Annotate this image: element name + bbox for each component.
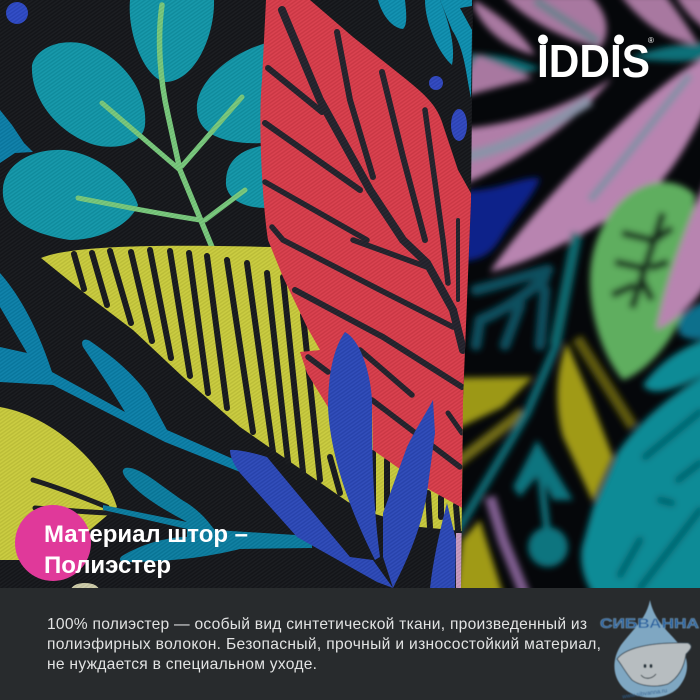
pink circle accent — [15, 505, 91, 581]
dark teal fronds — [476, 270, 548, 345]
red leaf — [260, 0, 472, 510]
green stem with branches — [78, 5, 245, 252]
dark veins of yellow round leaf — [33, 480, 110, 513]
blue frond behind heading — [103, 468, 312, 562]
heading: material — [44, 521, 248, 579]
logo: IDDIS: IDDIS — [537, 35, 650, 87]
pink strip at fold — [456, 533, 462, 588]
watermark: Sibvanna logo — [600, 600, 699, 700]
blue dots near red leaf — [429, 76, 467, 141]
description text: полиэфирных волокон. Безопасный, прочный и износостойкий материал, — [47, 636, 601, 653]
description text: 100% полиэстер — особый вид синтетической ткани, произведенный из — [47, 616, 587, 633]
blue leaves in front — [230, 332, 456, 588]
icon: small blue dot — [6, 2, 28, 24]
panel: sharp patterned curtain on the left — [0, 0, 475, 597]
heading: material: Полиэстер — [44, 552, 171, 579]
heading: material: Материал штор – — [44, 521, 248, 548]
footer panel — [0, 588, 700, 700]
top blue-teal fronds — [378, 0, 472, 98]
yellow round leaf, lower left — [0, 407, 117, 560]
striped yellow leaf — [41, 246, 470, 531]
description text: не нуждается в специальном уходе. — [47, 656, 317, 673]
description text — [47, 616, 601, 673]
watermark: Sibvanna logo: СИБВАННА — [600, 615, 699, 631]
cream blob near bottom edge — [72, 583, 98, 588]
lower left blue frond — [0, 273, 240, 472]
panel: blurred curtain background on the right — [450, 0, 700, 600]
teal eucalyptus leaves — [3, 0, 266, 240]
blue-teal frond at left edge — [0, 110, 33, 163]
logo: IDDIS: ® — [648, 36, 654, 45]
